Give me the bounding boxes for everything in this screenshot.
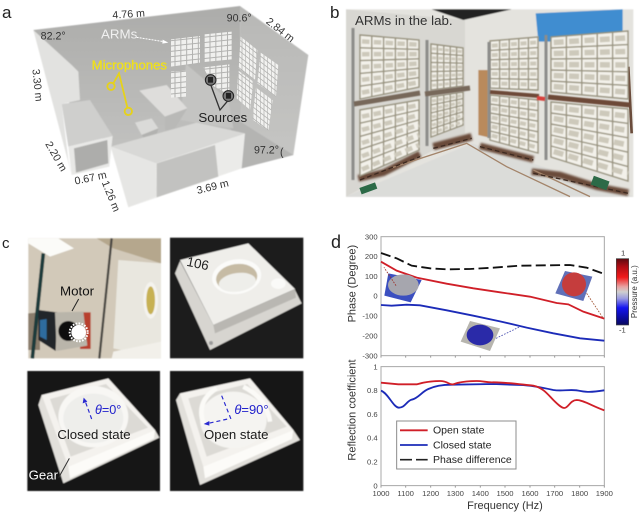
y tick labels: 1 [373, 362, 378, 371]
photo content [27, 371, 160, 491]
y tick labels: 100 [365, 272, 378, 281]
angle arrows [204, 396, 231, 426]
y tick labels: -300 [362, 351, 378, 360]
dimension labels: 4.76 m [112, 7, 145, 22]
dimension labels: 2.84 m [263, 16, 297, 45]
y tick labels: 300 [365, 232, 378, 241]
line: closed state reflection [381, 384, 604, 408]
x tick labels: 1300 [447, 489, 464, 498]
colour bar [616, 259, 629, 325]
heading: c: c [2, 235, 10, 252]
legend: Open state [433, 425, 485, 437]
heading: d: d [331, 232, 341, 252]
y tick labels: 0.8 [367, 386, 378, 395]
chart: phase vs frequency [346, 232, 639, 360]
arrow: ARMs [137, 37, 166, 42]
dimension labels: 0.67 m [73, 169, 108, 188]
colour bar labels: -1 [619, 326, 626, 335]
label: Closed state: Closed state [57, 427, 131, 442]
dimension labels: 90.6° [227, 13, 252, 25]
icon: microphones [107, 73, 132, 115]
colour bar labels: 1 [621, 249, 625, 258]
y tick labels: -200 [362, 331, 378, 340]
plot frame [381, 367, 604, 486]
arrowhead: ARMs [162, 40, 168, 44]
panel b: lab photo [346, 9, 633, 197]
x tick labels [372, 489, 613, 498]
dimension labels: 97.2° [254, 144, 279, 156]
legend [397, 421, 516, 469]
y tick labels: 0.6 [367, 410, 378, 419]
ARM panels in lab [360, 31, 628, 181]
inset: open state field left [384, 273, 422, 302]
dimension labels: ( [280, 146, 284, 158]
y tick labels: 0.4 [367, 434, 378, 443]
x tick labels: 1500 [496, 489, 514, 498]
dimension labels: 3.69 m [195, 177, 230, 197]
chart: reflection coefficient vs frequency [346, 359, 613, 512]
label: ARMs: ARMs [101, 26, 138, 41]
dimension labels: 82.2° [41, 30, 66, 42]
y tick labels [362, 232, 378, 360]
angle arrow [83, 398, 92, 419]
label: Gear: Gear [29, 467, 59, 482]
y tick labels: -100 [362, 312, 378, 321]
x axis title: Frequency (Hz) [467, 500, 543, 512]
dimension labels [29, 7, 297, 214]
label: Motor: Motor [60, 284, 95, 299]
line: closed state phase [381, 305, 604, 341]
line: phase difference [381, 253, 604, 274]
y axis title: Phase (Degree) [346, 245, 358, 322]
room geometry [33, 6, 308, 207]
x tick labels: 1200 [422, 489, 439, 498]
arrow: middle inset [496, 327, 520, 338]
icon: sources [205, 75, 234, 110]
handwritten number: 106 [185, 254, 210, 273]
y tick labels: 0 [373, 481, 378, 490]
line: open state phase [381, 262, 604, 319]
label: theta 90: θ=90° [234, 402, 269, 417]
photo content [28, 238, 161, 358]
x ticks [381, 486, 604, 488]
dimension labels: 3.30 m [29, 68, 45, 102]
panel c: motor photo [28, 238, 161, 358]
x ticks [381, 356, 604, 358]
legend: Phase difference [433, 454, 512, 466]
dimension labels: 1.26 m [99, 179, 122, 214]
heading: a: a [2, 3, 12, 22]
label: Microphones: Microphones [92, 57, 167, 72]
panel a: room model [29, 6, 308, 214]
x tick labels: 1600 [521, 489, 539, 498]
y axis title: Reflection coefficient [346, 359, 358, 461]
panel c: closed state photo [27, 371, 160, 491]
y tick labels [367, 362, 378, 490]
panel c: open state photo [170, 371, 303, 491]
arrow: gear [59, 458, 69, 478]
x tick labels: 1800 [571, 489, 588, 498]
ARM panels on right wall [237, 37, 278, 131]
ARM panels on back wall [171, 32, 232, 98]
photo background [346, 9, 633, 197]
x tick labels: 1100 [397, 489, 414, 498]
legend: Closed state [433, 439, 492, 451]
label: Sources: Sources [198, 110, 248, 125]
x tick labels: 1700 [546, 489, 563, 498]
heading: b: b [330, 3, 339, 22]
label: theta 0: θ=0° [95, 403, 121, 417]
y tick labels: 0 [373, 292, 378, 301]
cables on floor [358, 67, 632, 197]
x tick labels: 1900 [596, 489, 613, 498]
photo content [170, 238, 303, 358]
caption: ARMs in the lab: ARMs in the lab. [355, 13, 453, 28]
colour bar labels: Pressure (a.u.) [630, 265, 639, 318]
cell faces and gaps [360, 31, 628, 181]
arrow: motor [72, 299, 79, 311]
x tick labels: 1400 [472, 489, 489, 498]
arrow: right inset [587, 293, 603, 318]
y tick labels: 0.2 [367, 457, 378, 466]
inset: open state field right [555, 271, 592, 301]
metal frames [353, 28, 630, 180]
y tick labels: 200 [365, 252, 378, 261]
label: Open state: Open state [204, 427, 269, 442]
panel c: top of ARM photo [170, 238, 303, 358]
plot frame [381, 237, 604, 356]
inset: closed state field [461, 321, 500, 351]
arrow: left inset [384, 267, 396, 286]
x tick labels: 1000 [372, 489, 390, 498]
icon: gear [70, 323, 88, 341]
line: open state reflection [381, 381, 604, 410]
oval openings [362, 38, 628, 174]
colour bar labels [619, 249, 639, 335]
dimension labels: 2.20 m [42, 139, 69, 174]
photo content [170, 371, 303, 491]
